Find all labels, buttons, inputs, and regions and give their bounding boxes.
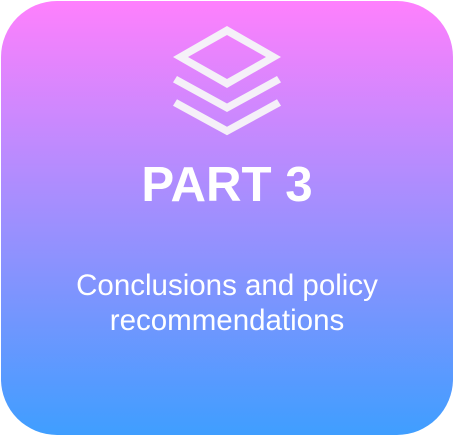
text block: subtitle bbox=[76, 269, 378, 337]
heading: PART 3 bbox=[141, 157, 313, 212]
icon: bottom chevron layer bbox=[173, 99, 281, 135]
icon: middle chevron layer bbox=[173, 76, 281, 112]
text block: subtitle: Conclusions and policy bbox=[76, 269, 378, 302]
text block: subtitle: recommendations bbox=[110, 304, 344, 337]
icon: top diamond layer bbox=[173, 26, 281, 88]
